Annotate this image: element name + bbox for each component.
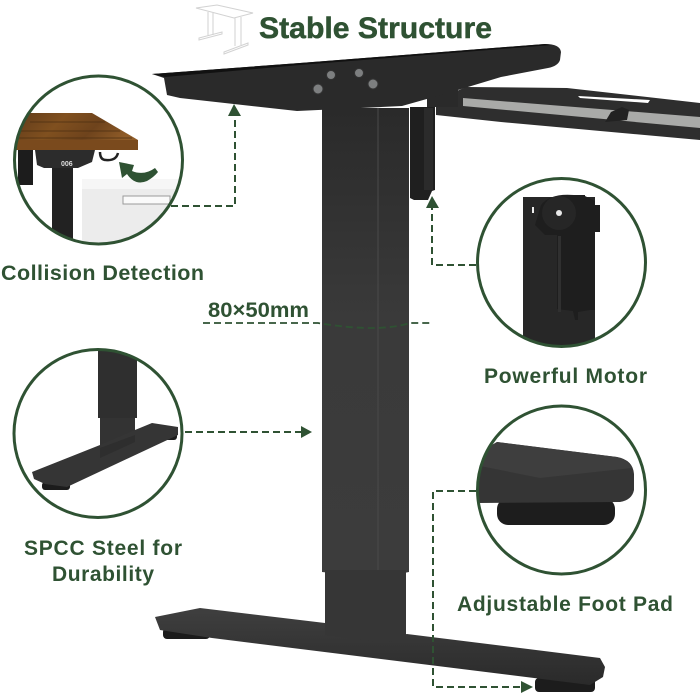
display: 006 [61, 161, 73, 168]
heading: durability: Durability [52, 563, 154, 586]
panel: adjustable foot pad [470, 406, 646, 574]
arrow: collision detection to plate [171, 104, 241, 206]
motor housing [410, 107, 435, 200]
foot base [155, 570, 605, 692]
heading: SPCC steel: SPCC Steel for [24, 537, 182, 560]
top mounting plate [152, 44, 561, 111]
desk beam [427, 87, 700, 140]
icon: desk outline [196, 5, 253, 54]
panel: SPCC steel [14, 345, 182, 518]
main column [322, 108, 409, 645]
dimension label: 80×50mm [208, 299, 309, 322]
arrow: foot pad [433, 491, 533, 693]
heading: adjustable foot pad: Adjustable Foot Pad [457, 593, 673, 616]
heading: powerful motor: Powerful Motor [484, 365, 647, 388]
icon: bolts [313, 68, 378, 94]
title: Stable Structure [259, 12, 492, 45]
arrow: steel [185, 426, 312, 438]
arrow: motor [426, 196, 476, 265]
icon: curved collision arrow [119, 162, 158, 182]
panel: powerful motor [478, 178, 646, 357]
dimension line [203, 323, 432, 328]
panel: collision detection [14, 76, 184, 250]
heading: collision detection: Collision Detection [1, 261, 204, 285]
